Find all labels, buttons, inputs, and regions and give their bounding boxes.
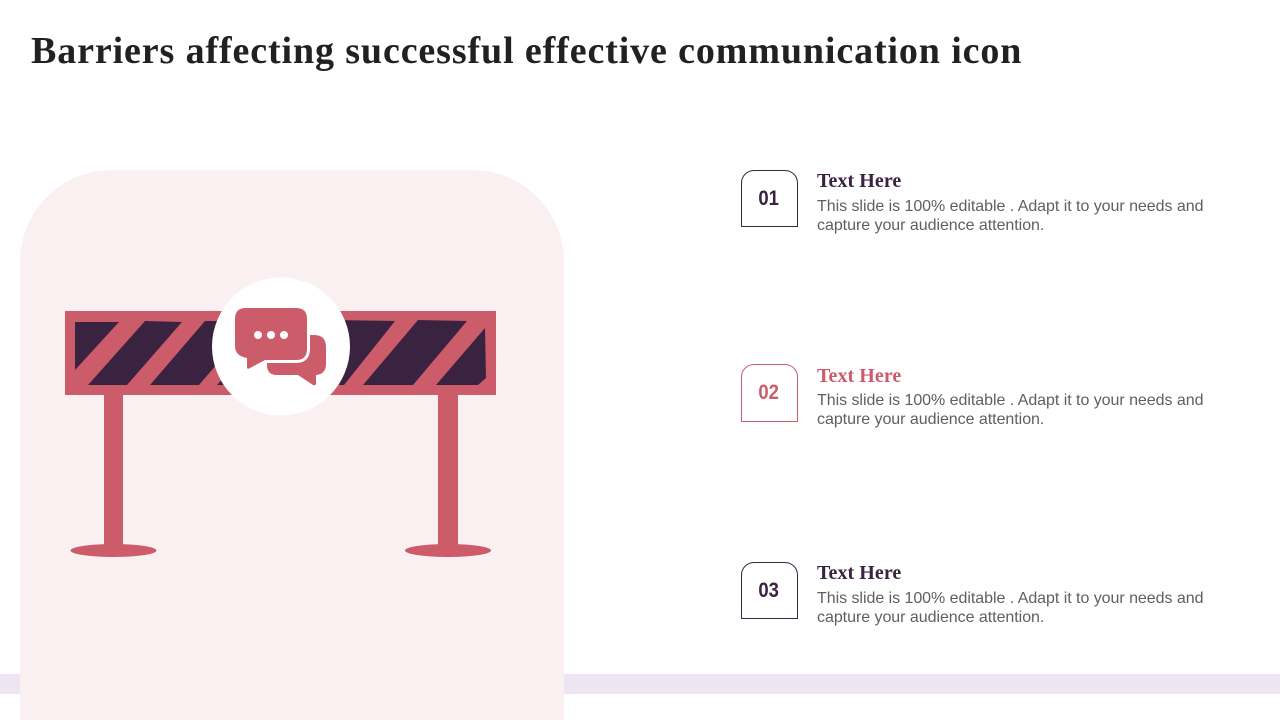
description 03 bbox=[817, 590, 1203, 626]
barrier stripes bbox=[75, 320, 486, 385]
heading 02: Text Here bbox=[817, 365, 901, 387]
barrier posts bbox=[70, 390, 491, 557]
front bubble bbox=[235, 308, 307, 369]
description 03: capture your audience attention. bbox=[817, 609, 1044, 626]
description 01 bbox=[817, 198, 1203, 234]
description 02 bbox=[817, 392, 1203, 428]
heading 03: Text Here bbox=[817, 562, 901, 584]
panel: illustration background bbox=[20, 170, 564, 720]
title: Barriers affecting successful effective communication icon bbox=[31, 30, 1022, 72]
number 01: 01 bbox=[758, 187, 779, 210]
barrier bbox=[65, 311, 496, 557]
icon circle bbox=[212, 278, 350, 416]
bubble dots bbox=[254, 331, 288, 339]
number 03: 03 bbox=[758, 579, 779, 602]
description 02: This slide is 100% editable . Adapt it to your needs and bbox=[817, 392, 1203, 409]
description 02: capture your audience attention. bbox=[817, 411, 1044, 428]
number 02 bbox=[741, 364, 798, 422]
item 01 bbox=[741, 170, 1203, 234]
description 03: This slide is 100% editable . Adapt it to your needs and bbox=[817, 590, 1203, 607]
bottom band bbox=[0, 674, 1280, 694]
number 03 bbox=[741, 562, 798, 619]
number 01 bbox=[741, 170, 798, 227]
barrier board bbox=[65, 311, 496, 395]
heading 01: Text Here bbox=[817, 170, 901, 192]
back bubble bbox=[267, 335, 326, 385]
item 02 bbox=[741, 364, 1203, 428]
icon: chat bubbles bbox=[235, 308, 326, 385]
item 03 bbox=[741, 562, 1203, 626]
description 01: capture your audience attention. bbox=[817, 217, 1044, 234]
number 02: 02 bbox=[758, 381, 779, 404]
description 01: This slide is 100% editable . Adapt it to your needs and bbox=[817, 198, 1203, 215]
